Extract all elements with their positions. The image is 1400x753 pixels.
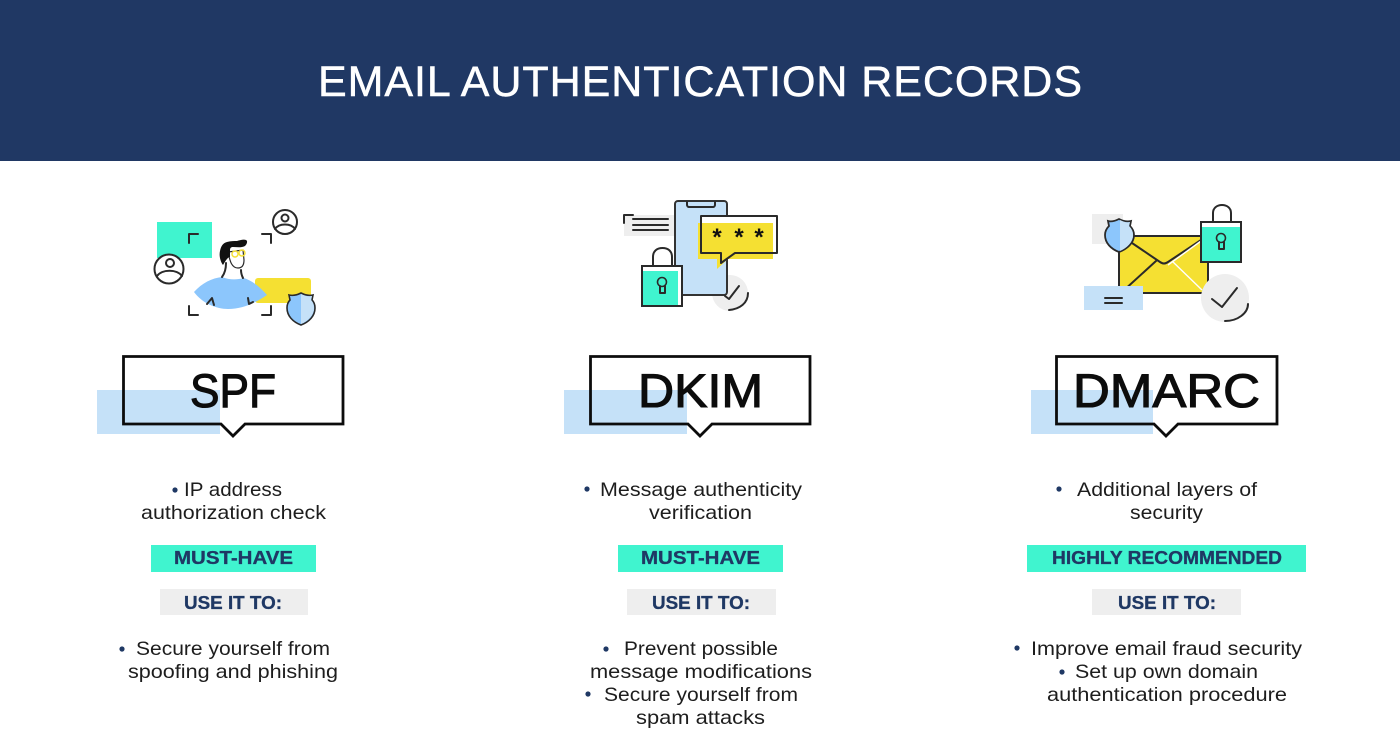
list: DKIM uses: message modifications: [590, 661, 812, 683]
icon: envelope with shield, lock and check: [1084, 205, 1249, 322]
list: DKIM uses: spam attacks: [636, 707, 765, 729]
list: DMARC uses: Improve email fraud security: [1031, 638, 1302, 660]
panel: SPF: [97, 210, 343, 683]
list: SPF uses: Secure yourself from: [136, 638, 330, 660]
icon: person with user identity frame: [154, 210, 315, 325]
icon: phone with password and lock: [624, 201, 777, 311]
list: DKIM uses: Prevent possible: [624, 638, 778, 660]
text: DMARC purpose: security: [1130, 502, 1203, 524]
label: use it to: [627, 589, 776, 615]
badge: must-have: MUST-HAVE: [641, 548, 760, 568]
text: DMARC purpose: Additional layers of: [1077, 479, 1258, 501]
text: SPF purpose: [141, 479, 326, 524]
list: DMARC uses: [1014, 638, 1302, 706]
list: SPF uses: spoofing and phishing: [128, 661, 338, 683]
title: EMAIL AUTHENTICATION RECORDS: [318, 58, 1082, 106]
label: use it to: USE IT TO:: [184, 593, 282, 613]
text: DKIM purpose: Message authenticity: [600, 479, 802, 501]
icon: phone with password and lock: *: [734, 224, 744, 251]
text: DKIM purpose: verification: [649, 502, 752, 524]
list: DMARC uses: authentication procedure: [1047, 684, 1287, 706]
heading: DMARC: [1031, 356, 1277, 436]
list: SPF uses: [119, 638, 338, 683]
text: SPF purpose: IP address: [184, 479, 282, 501]
label: use it to: USE IT TO:: [652, 593, 750, 613]
text: DMARC purpose: [1056, 479, 1258, 524]
heading: DMARC: DMARC: [1073, 364, 1260, 417]
heading: DKIM: DKIM: [638, 364, 763, 417]
panel: DKIM: [564, 201, 812, 729]
label: use it to: USE IT TO:: [1118, 593, 1216, 613]
badge: must-have: MUST-HAVE: [174, 548, 293, 568]
text: SPF purpose: authorization check: [141, 502, 326, 524]
badge: must-have: [151, 545, 316, 572]
header banner: [0, 0, 1400, 161]
heading: SPF: [97, 356, 343, 436]
heading: DKIM: [564, 356, 810, 436]
badge: highly recommended: HIGHLY RECOMMENDED: [1052, 548, 1282, 568]
panel: DMARC: [1014, 205, 1306, 706]
list: DKIM uses: [585, 638, 812, 729]
label: use it to: [160, 589, 308, 615]
heading: SPF: SPF: [190, 364, 276, 417]
icon: phone with password and lock: *: [754, 224, 764, 251]
badge: must-have: [618, 545, 783, 572]
text: DKIM purpose: [584, 479, 802, 524]
list: DKIM uses: Secure yourself from: [604, 684, 798, 706]
icon: phone with password and lock: *: [712, 224, 722, 251]
list: DMARC uses: Set up own domain: [1075, 661, 1258, 683]
badge: highly recommended: [1027, 545, 1306, 572]
label: use it to: [1092, 589, 1241, 615]
